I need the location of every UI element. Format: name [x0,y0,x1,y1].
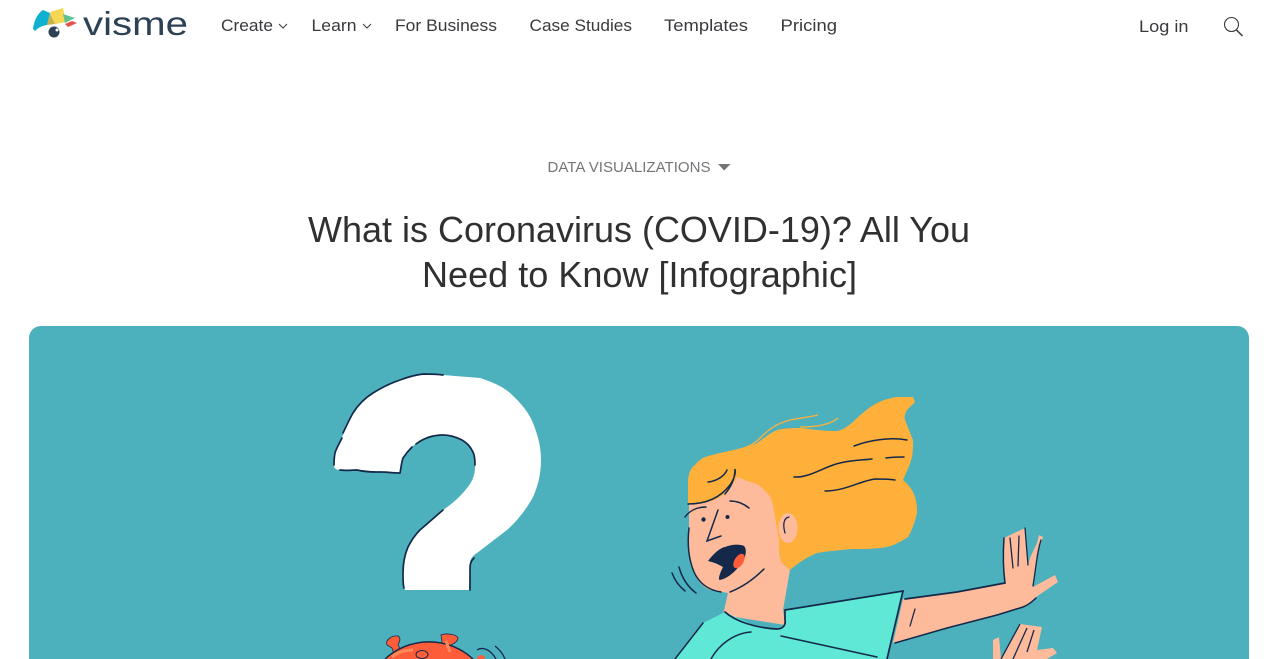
icon: visme chameleon mark [33,8,77,38]
title: Need to Know [Infographic] [422,254,857,295]
icon: search [1224,18,1242,36]
illustration: virus [385,634,505,659]
virus body [385,642,473,659]
nav item: Templates: Templates [664,17,748,35]
nav item: Learn: Learn [312,17,356,35]
wordmark: visme [83,5,188,42]
illustration: frightened woman [672,397,1058,659]
hair [688,397,917,570]
title [308,209,970,295]
navigation menu [221,17,1242,36]
logo: visme [33,5,188,42]
panel: hero illustration [29,326,1249,659]
ear [778,513,798,543]
nav item: For Business: For Business [395,17,497,35]
hair strands [688,415,907,504]
shirt [675,591,903,659]
nav item: Case Studies: Case Studies [530,17,632,35]
title: What is Coronavirus (COVID-19)? All You [308,209,970,250]
category dropdown: data visualizations: DATA VISUALIZATIONS [548,160,710,176]
face details [672,501,764,593]
arm and hand [893,528,1058,643]
nav item: Log in: Log in [1139,18,1188,36]
nav item: Pricing: Pricing [780,17,837,35]
nav item: Create: Create [221,17,273,35]
eyes [701,515,730,522]
mouth [708,545,747,580]
icon: question mark [334,374,541,590]
second hand [993,624,1057,659]
neck and face [689,477,790,625]
virus spikes [387,636,401,654]
panel background [29,326,1249,659]
